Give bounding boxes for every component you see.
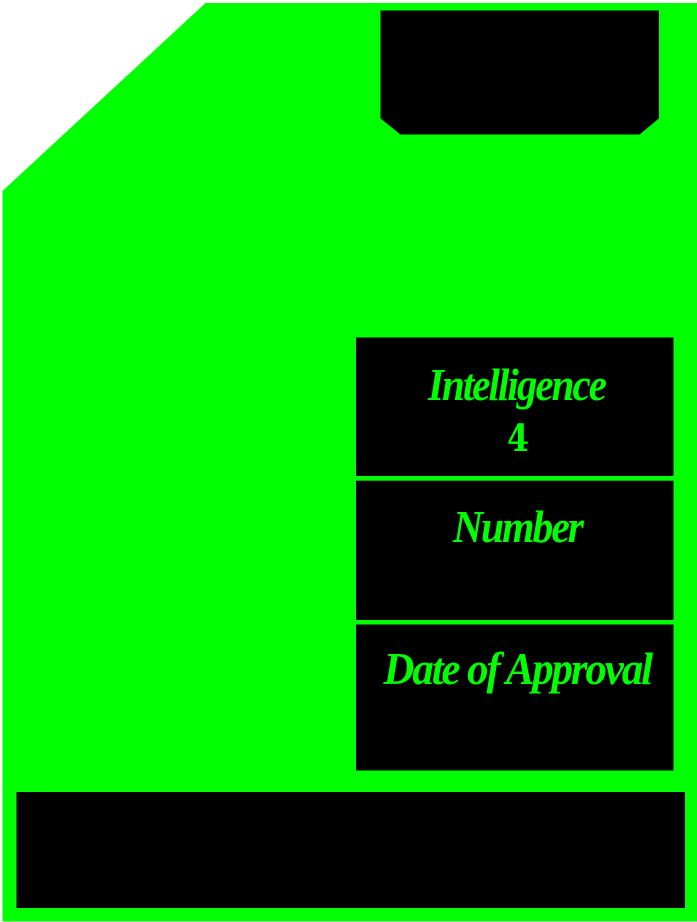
panel: date of approval bbox=[356, 624, 674, 770]
value: 4: 4 bbox=[507, 416, 529, 460]
heading: date of approval: Date of Approval bbox=[383, 643, 653, 694]
panel: number bbox=[356, 481, 674, 620]
panel: intelligence bbox=[356, 338, 674, 476]
top black tab bbox=[380, 10, 659, 134]
bottom black panel bbox=[16, 792, 685, 908]
heading: number: Number bbox=[452, 501, 585, 552]
heading: intelligence: Intelligence bbox=[427, 359, 607, 410]
